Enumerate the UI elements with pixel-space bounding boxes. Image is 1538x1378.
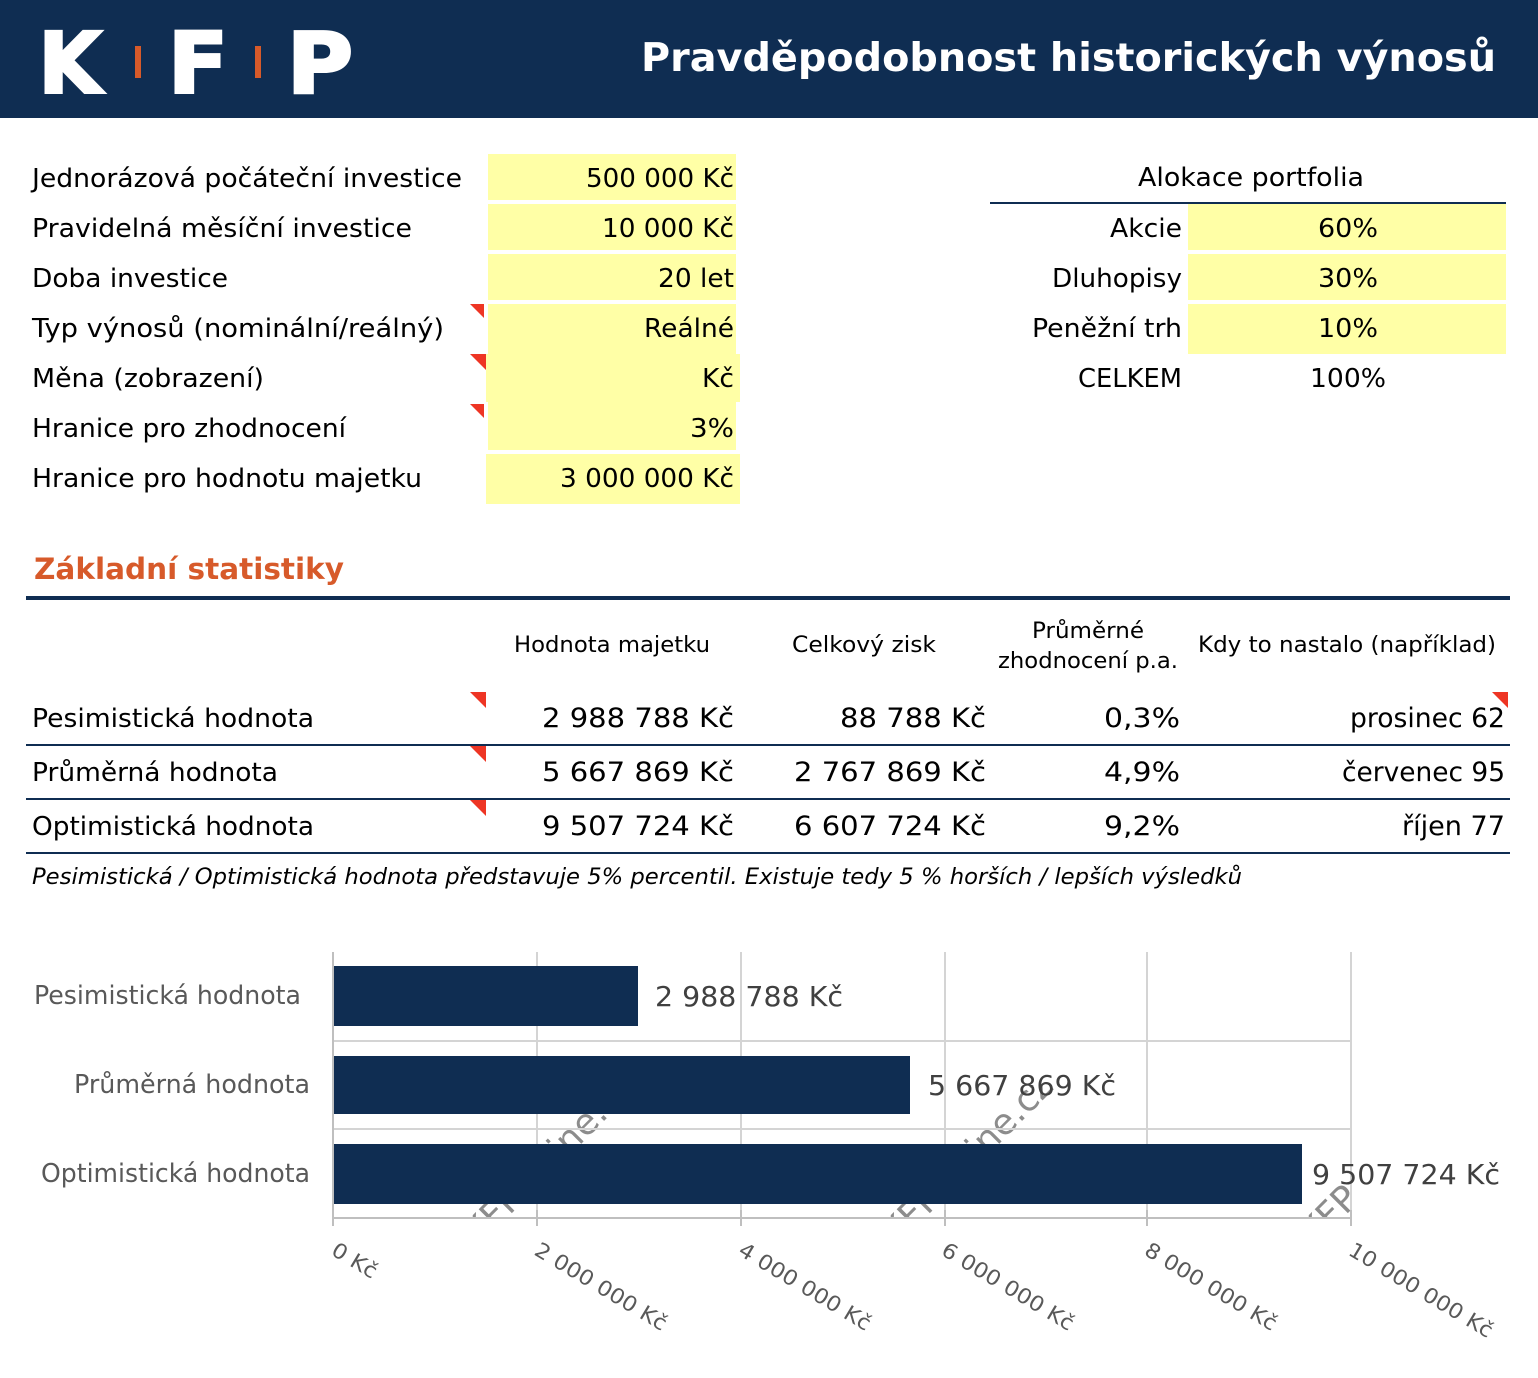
input labels: Hranice pro hodnotu majetku [32, 464, 422, 494]
row: pessimistic: 2 988 788 Kč [542, 703, 734, 734]
input values: 3% [690, 414, 734, 444]
row: average: červenec 95 [1342, 757, 1505, 788]
category labels: Pesimistická hodnota [34, 981, 301, 1011]
table header: Celkový zisk [792, 633, 936, 658]
watermark: KFPonline.cz [455, 1065, 643, 1253]
axes [333, 952, 1351, 1226]
heading: basic statistics: Základní statistiky [34, 552, 344, 586]
panel: portfolio allocation [990, 163, 1506, 394]
row: pessimistic [32, 703, 1505, 734]
grid lines [333, 952, 1351, 1218]
row: pessimistic: Pesimistická hodnota [32, 704, 314, 734]
x axis labels: 0 Kč [327, 1238, 382, 1284]
row: average: 2 767 869 Kč [794, 757, 986, 788]
bars [334, 966, 1302, 1204]
panel: investment inputs [30, 154, 740, 504]
x axis labels [327, 1238, 1497, 1343]
allocation values: 30% [1318, 264, 1378, 294]
input values: 10 000 Kč [602, 214, 734, 244]
comment markers [470, 692, 1508, 816]
allocation cells [1188, 204, 1506, 354]
input labels: Jednorázová počáteční investice [30, 164, 462, 194]
watermark: KFPonline.cz [873, 1065, 1061, 1253]
x axis labels: 6 000 000 Kč [937, 1238, 1078, 1336]
input values: 3 000 000 Kč [560, 464, 734, 494]
input labels: Pravidelná měsíční investice [32, 214, 412, 244]
data labels: 9 507 724 Kč [1312, 1158, 1500, 1191]
data labels: 2 988 788 Kč [655, 980, 843, 1013]
data labels [655, 980, 1500, 1191]
row: pessimistic: 88 788 Kč [840, 703, 986, 734]
allocation values [1310, 214, 1386, 394]
input values [560, 164, 734, 494]
allocation values: 60% [1318, 214, 1378, 244]
logo: KFP: K [38, 14, 104, 112]
table header: Kdy to nastalo (například) [1198, 633, 1496, 658]
table header: Hodnota majetku [514, 633, 710, 658]
allocation labels: Peněžní trh [1032, 314, 1182, 344]
allocation values: 100% [1310, 364, 1386, 394]
category labels [34, 981, 310, 1189]
watermark: KFPonline.cz [1291, 1065, 1479, 1253]
category labels: Průměrná hodnota [74, 1070, 310, 1100]
x axis labels: 8 000 000 Kč [1140, 1238, 1281, 1336]
logo: KFP [38, 14, 353, 112]
row: optimistic: Optimistická hodnota [32, 812, 314, 842]
input values: Kč [702, 364, 734, 394]
allocation values: 10% [1318, 314, 1378, 344]
table: statistics [26, 619, 1510, 890]
input labels: Měna (zobrazení) [32, 364, 264, 394]
input values: 500 000 Kč [586, 164, 734, 194]
data labels: 5 667 869 Kč [928, 1069, 1116, 1102]
x axis labels: 4 000 000 Kč [734, 1238, 875, 1336]
row: average: Průměrná hodnota [32, 758, 278, 788]
row: optimistic: říjen 77 [1402, 811, 1505, 842]
footnote: Pesimistická / Optimistická hodnota představuje 5% percentil. Existuje tedy 5 % horších / lepších výsledků [32, 864, 1242, 890]
input values: 20 let [658, 264, 734, 294]
x axis labels: 2 000 000 Kč [530, 1238, 671, 1336]
table header [514, 619, 1496, 674]
input values: Reálné [644, 314, 734, 344]
row: average [32, 757, 1505, 788]
input cells [486, 154, 740, 504]
title: Pravděpodobnost historických výnosů [641, 36, 1496, 81]
input labels: Hranice pro zhodnocení [32, 414, 347, 444]
row rules [26, 744, 1510, 854]
row: optimistic [32, 811, 1505, 842]
x axis labels: 10 000 000 Kč [1344, 1238, 1497, 1343]
allocation labels: CELKEM [1078, 364, 1182, 394]
logo: KFP: F [168, 14, 228, 112]
row: average: 4,9% [1104, 757, 1180, 788]
category labels: Optimistická hodnota [41, 1159, 310, 1189]
allocation heading: Alokace portfolia [1138, 163, 1364, 193]
allocation labels [1032, 214, 1182, 394]
comment markers [470, 304, 486, 418]
logo: KFP: P [287, 14, 353, 112]
row: optimistic: 9 507 724 Kč [542, 811, 734, 842]
row: optimistic: 9,2% [1104, 811, 1180, 842]
allocation labels: Akcie [1110, 214, 1182, 244]
table header: zhodnocení p.a. [998, 649, 1178, 674]
allocation labels: Dluhopisy [1052, 264, 1182, 294]
input labels: Typ výnosů (nominální/reálný) [31, 314, 444, 344]
row: average: 5 667 869 Kč [542, 757, 734, 788]
table header: Průměrné [1032, 619, 1144, 644]
bar chart [34, 952, 1500, 1343]
watermark [472, 1085, 1350, 1217]
input labels [30, 164, 462, 494]
header band [0, 0, 1538, 118]
row: pessimistic: prosinec 62 [1350, 703, 1505, 734]
row: pessimistic: 0,3% [1104, 703, 1180, 734]
row: optimistic: 6 607 724 Kč [794, 811, 986, 842]
input labels: Doba investice [32, 264, 228, 294]
